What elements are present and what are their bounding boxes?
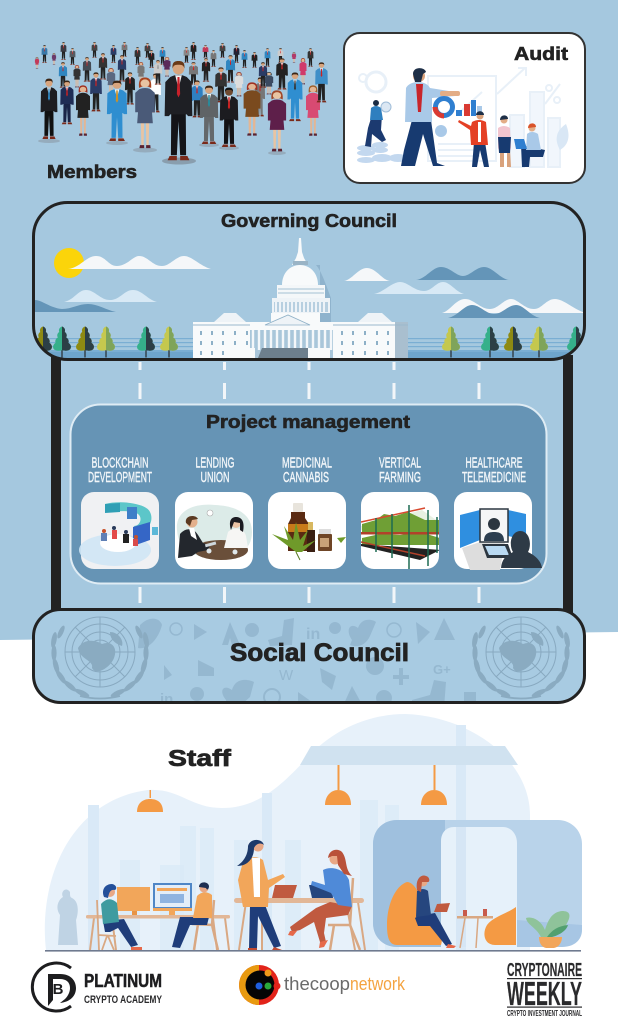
potted plant [526,911,569,948]
logo: thecoop network: network [350,974,406,994]
panel: audit [344,33,585,183]
desk left with monitors [86,883,230,950]
background: blue upper section [0,0,618,640]
project: blockchain development [79,454,159,569]
logo: thecoop network: thecoop [284,974,350,994]
UN emblem left [50,617,150,699]
faded social media icons: G+ [433,662,451,677]
label: HEALTHCARE [466,454,522,472]
illustration card [268,492,346,569]
illustration card [361,492,442,570]
audit coins [357,142,407,163]
faded social media icons: in [306,626,320,643]
governing council heading: Governing Council [221,211,397,231]
project: medicinal cannabis [268,454,346,569]
label: UNION [200,469,230,486]
ceiling lamps [137,765,447,812]
water stripes [33,338,585,352]
faded social media icons: W [279,667,294,684]
label: CANNABIS [283,469,329,486]
panel: project management [70,404,546,584]
label [88,454,152,486]
logo: platinum crypto academy [32,963,162,1011]
audit woman [498,115,511,167]
back row figures [35,42,313,69]
viewer silhouette [501,531,542,568]
woman on bean bag [387,876,456,948]
illustration card [79,492,159,569]
panel: governing council [33,202,586,360]
sitting woman at desk [288,850,360,950]
label [462,454,526,486]
label: DEVELOPMENT [88,469,152,486]
coffee table and orange chair [457,907,516,948]
right seated man [172,882,218,950]
label: VERTICAL [379,454,421,472]
illustration card [454,492,542,570]
trees [38,326,52,351]
faded social media icons [138,618,476,708]
wings [193,322,250,358]
label [196,454,234,486]
audit climbing man [365,100,391,147]
audit donut and bars [435,98,482,137]
dashed connectors lower [138,587,480,603]
windows [200,331,389,355]
faded social media icons: in [160,691,173,708]
office background blob [45,714,530,950]
label: Members: Members [47,162,137,182]
label [282,454,332,486]
ceiling beam [300,746,518,765]
cannabis leaf [272,522,316,552]
left seated woman [97,884,142,950]
dome [292,238,308,265]
audit heading: Audit [514,44,568,64]
capitol building [193,238,408,358]
window columns and city [88,725,466,950]
label: BLOCKCHAIN [92,454,148,472]
audit seated woman with laptop [514,123,545,167]
project management heading: Project management [206,412,410,432]
project: lending union [175,454,253,569]
desk right with laptops [234,885,365,950]
audit red jacket man [458,111,489,167]
project: vertical farming [361,454,442,570]
staff office illustration [45,714,582,952]
dashed connectors upper [138,362,480,399]
label: TELEMEDICINE [462,469,526,486]
logo: thecoop network [239,965,406,1005]
label: FARMING [379,469,421,486]
social council heading: Social Council [230,639,409,667]
clouds [68,256,211,269]
label [379,454,421,486]
lounge pod [373,820,582,947]
logo: cryptonaire weekly [507,960,582,1018]
audit background chart shapes [359,68,568,167]
audit large man [401,68,460,166]
portico [250,322,333,358]
illustration card [175,492,253,569]
project: healthcare telemedicine [454,454,542,570]
floor line [45,950,581,952]
logo: platinum crypto academy: CRYPTO ACADEMY [84,994,162,1006]
label: LENDING [196,454,234,472]
pillars linking councils [51,355,573,613]
logo: platinum crypto academy: PLATINUM [84,971,162,991]
sun [54,248,84,278]
middle row figures [59,53,306,117]
dome shadow [316,265,331,322]
steps [258,348,308,358]
front row figures [38,62,328,155]
label: MEDICINAL [282,454,332,472]
panel: social council [34,610,584,708]
crowd of members [35,42,328,164]
central figure [162,61,196,164]
governing council landscape [33,248,586,360]
staff heading: Staff [168,745,231,771]
UN emblem right [471,617,571,699]
logo: platinum crypto academy: B [53,981,64,998]
background colleague silhouette [57,889,78,945]
standing woman [237,840,285,950]
